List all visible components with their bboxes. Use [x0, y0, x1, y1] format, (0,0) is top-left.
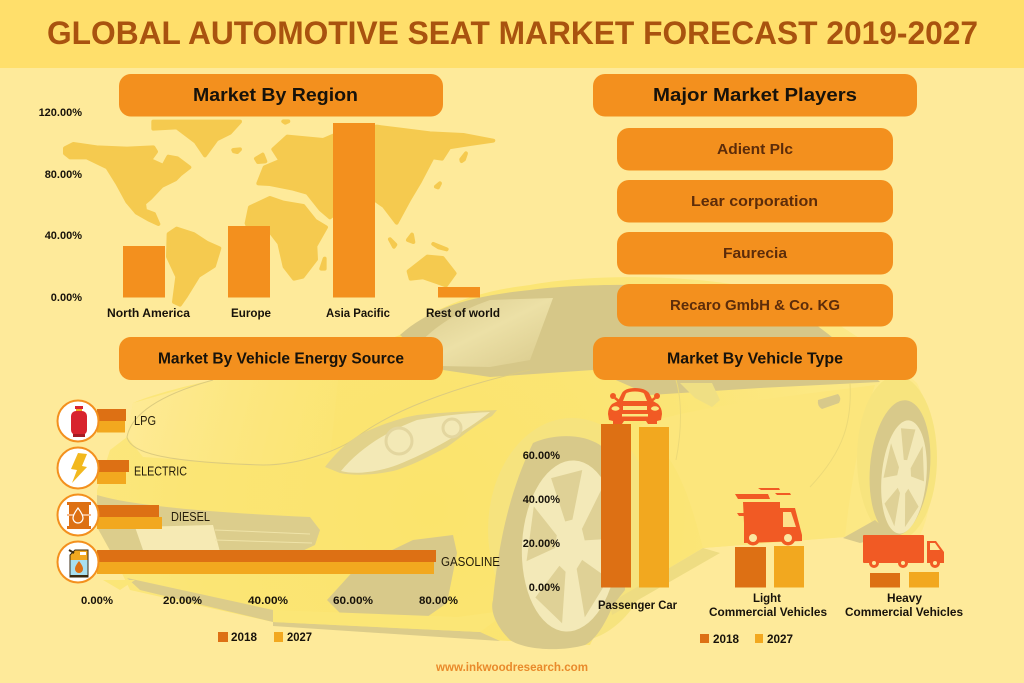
- energy labels: DIESEL: [171, 510, 210, 524]
- player: Lear corporation: [617, 180, 893, 222]
- windshield frame: [400, 285, 880, 395]
- icon: electric bolt: [58, 448, 98, 488]
- region bars: [123, 123, 480, 298]
- rear rim: [877, 418, 931, 536]
- player: Recaro: [617, 284, 893, 326]
- rear tyre: [864, 398, 936, 538]
- door lines: [676, 380, 850, 487]
- region labels: [107, 308, 500, 320]
- front wheel arch: [488, 418, 656, 642]
- y axis labels: [39, 107, 82, 304]
- legend: energy source: [218, 632, 312, 644]
- energy labels: ELECTRIC: [134, 464, 187, 478]
- y axis labels: 60.00%: [523, 450, 560, 462]
- sill band: [610, 548, 720, 615]
- y axis labels: 80.00%: [45, 169, 82, 181]
- player: Faurecia: Faurecia: [723, 245, 788, 262]
- icon: heavy commercial truck: [863, 535, 944, 568]
- panel: market by region heading: [119, 74, 443, 116]
- x axis labels: 0.00%: [81, 595, 113, 607]
- x axis labels: 80.00%: [419, 595, 458, 607]
- vehicle category labels: Light: [753, 593, 781, 605]
- front rim: [515, 458, 625, 636]
- fog lamp: [327, 535, 457, 617]
- y axis labels: 40.00%: [45, 230, 82, 242]
- player: Lear corporation: Lear corporation: [691, 193, 818, 210]
- legend: energy source: 2018: [231, 632, 258, 644]
- energy labels: GASOLINE: [441, 555, 500, 569]
- legend: vehicle type: 2018: [713, 634, 740, 646]
- lower bumper band: [127, 578, 500, 641]
- y axis labels: 0.00%: [51, 292, 82, 304]
- front tyre: [492, 436, 625, 649]
- x axis labels: [81, 595, 458, 607]
- region labels: Rest of world: [426, 308, 500, 320]
- panel: vehicle type heading: [593, 337, 917, 380]
- world map: [65, 121, 493, 305]
- panel: vehicle type heading: Market By Vehicle Type: [667, 350, 843, 368]
- icon: gasoline can: [58, 542, 98, 582]
- y axis labels: 40.00%: [523, 494, 560, 506]
- mirror: [680, 383, 720, 407]
- player: Adient Plc: Adient Plc: [717, 141, 793, 158]
- player: Faurecia: [617, 232, 893, 274]
- door highlight: [640, 385, 875, 548]
- background car illustration: [97, 277, 937, 649]
- energy bars: [97, 409, 436, 574]
- legend: vehicle type: 2027: [767, 634, 793, 646]
- icon: diesel barrel: [58, 494, 98, 536]
- bar chart: vehicle energy source: [58, 400, 500, 644]
- legend: vehicle type: [700, 634, 793, 646]
- x axis labels: 40.00%: [248, 595, 288, 607]
- rear wheel arch: [857, 376, 937, 540]
- car body: [97, 277, 934, 645]
- header band: [0, 0, 1024, 68]
- panel: market by region heading: Market By Region: [193, 84, 358, 105]
- vehicle bars: [601, 424, 939, 588]
- y axis labels: [523, 450, 560, 594]
- panel: vehicle energy source heading: [119, 337, 443, 380]
- panel: major market players heading: [593, 74, 917, 116]
- vehicle category labels: Commercial Vehicles: [845, 607, 963, 619]
- bar chart: vehicle type: [523, 388, 963, 646]
- y axis labels: 120.00%: [39, 107, 82, 119]
- grille: [97, 495, 320, 570]
- x axis labels: 20.00%: [163, 595, 202, 607]
- vehicle category labels: [598, 593, 963, 619]
- energy labels: [134, 414, 500, 569]
- vehicle category labels: Passenger Car: [598, 600, 678, 612]
- region labels: Europe: [231, 308, 271, 320]
- icon: passenger car: [608, 388, 662, 424]
- panel: major market players heading: Major Market Players: [653, 84, 857, 105]
- title: GLOBAL AUTOMOTIVE SEAT MARKET FORECAST 2019-2027: [47, 15, 978, 51]
- bar chart: market by region: [39, 107, 500, 320]
- hood highlight: [127, 362, 340, 465]
- x axis labels: 60.00%: [333, 595, 373, 607]
- icon: light commercial truck: [735, 488, 802, 546]
- rear tyre tail: [843, 520, 892, 543]
- hood line: [127, 370, 530, 465]
- footer url: www.inkwoodresearch.com: [435, 662, 588, 674]
- door handle: [818, 394, 840, 409]
- y axis labels: 20.00%: [523, 538, 560, 550]
- legend: energy source: 2027: [287, 632, 312, 644]
- energy labels: LPG: [134, 414, 156, 428]
- panel: market players list: [617, 128, 893, 326]
- region labels: North America: [107, 308, 191, 320]
- player: Adient Plc: [617, 128, 893, 170]
- region labels: Asia Pacific: [326, 308, 391, 320]
- icon: LPG cylinder: [58, 400, 98, 442]
- vehicle category labels: Commercial Vehicles: [709, 607, 827, 619]
- player: Recaro: Recaro GmbH & Co. KG: [670, 297, 840, 314]
- y axis labels: 0.00%: [529, 582, 560, 594]
- vehicle category labels: Heavy: [887, 593, 923, 605]
- windshield glass: [413, 298, 553, 367]
- headlight: [325, 410, 497, 475]
- panel: vehicle energy source heading: Market By Vehicle Energy Source: [158, 350, 404, 368]
